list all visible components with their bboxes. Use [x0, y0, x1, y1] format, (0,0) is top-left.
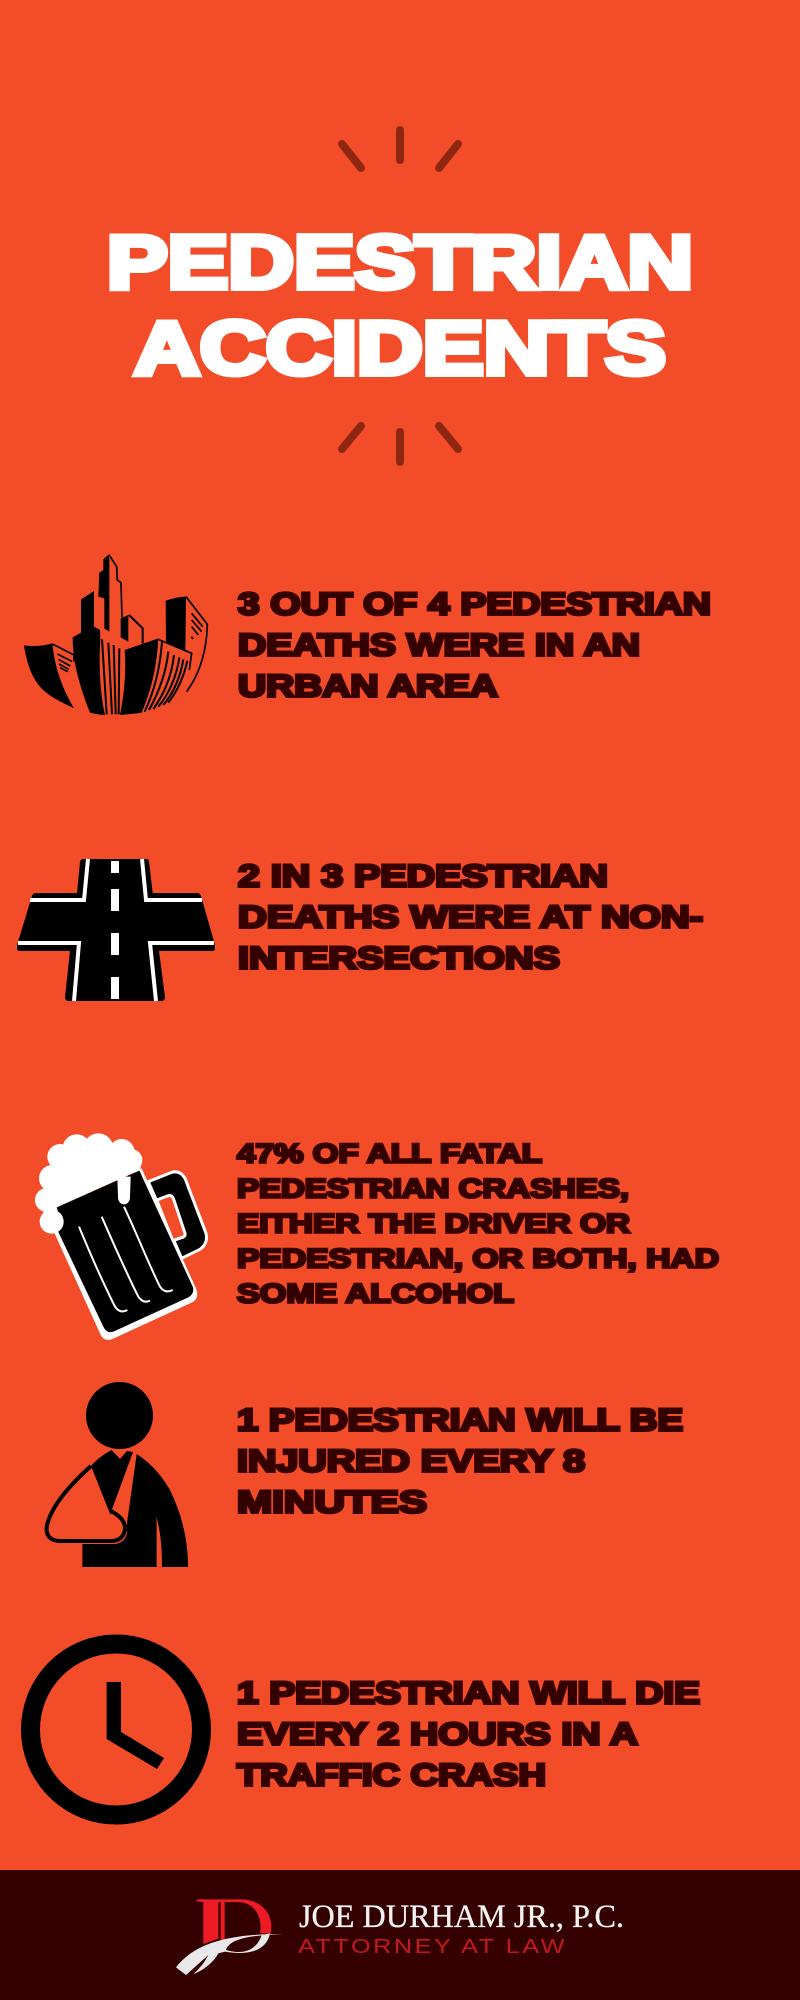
- title: [107, 220, 693, 390]
- logo: JD monogram: [176, 1899, 285, 1975]
- text: injury statistic: MINUTES: [237, 1484, 427, 1520]
- text: non-intersections: INTERSECTIONS: [238, 940, 560, 976]
- icon: clock: [30, 1644, 202, 1815]
- text: urban deaths: [238, 586, 711, 704]
- text: non-intersections: [238, 858, 703, 976]
- text: alcohol statistic: SOME ALCOHOL: [237, 1279, 514, 1309]
- text: alcohol statistic: PEDESTRIAN, OR BOTH, HAD: [237, 1244, 719, 1274]
- text: alcohol statistic: [237, 1139, 719, 1309]
- text: alcohol statistic: 47% OF ALL FATAL: [237, 1139, 542, 1169]
- text: injury statistic: INJURED EVERY 8: [237, 1442, 585, 1478]
- footer bar: [0, 1870, 800, 2000]
- text: non-intersections: DEATHS WERE AT NON-: [238, 898, 703, 934]
- logo: tagline: ATTORNEY AT LAW: [298, 1936, 567, 1958]
- logo: firm name: JOE DURHAM JR., P.C.: [299, 1899, 624, 1935]
- title: PEDESTRIAN: [107, 220, 693, 304]
- text: urban deaths: 3 OUT OF 4 PEDESTRIAN: [238, 586, 711, 622]
- text: urban deaths: DEATHS WERE IN AN: [238, 626, 640, 662]
- decorative sparks above title: [342, 130, 458, 168]
- text: death statistic: 1 PEDESTRIAN WILL DIE: [237, 1674, 700, 1710]
- icon: city skyline: [24, 555, 207, 715]
- icon: beer mug: [35, 1133, 207, 1340]
- icon: person with arm sling: [47, 1382, 188, 1567]
- icon: road intersection: [17, 859, 215, 1001]
- text: urban deaths: URBAN AREA: [238, 668, 498, 704]
- text: injury statistic: [237, 1402, 683, 1520]
- text: death statistic: EVERY 2 HOURS IN A: [237, 1716, 638, 1752]
- text: injury statistic: 1 PEDESTRIAN WILL BE: [237, 1402, 683, 1438]
- title: ACCIDENTS: [134, 306, 666, 390]
- decorative sparks below title: [342, 426, 458, 462]
- text: death statistic: [237, 1674, 700, 1792]
- text: death statistic: TRAFFIC CRASH: [237, 1756, 546, 1792]
- text: non-intersections: 2 IN 3 PEDESTRIAN: [238, 858, 608, 894]
- text: alcohol statistic: EITHER THE DRIVER OR: [237, 1209, 630, 1239]
- text: alcohol statistic: PEDESTRIAN CRASHES,: [237, 1174, 629, 1204]
